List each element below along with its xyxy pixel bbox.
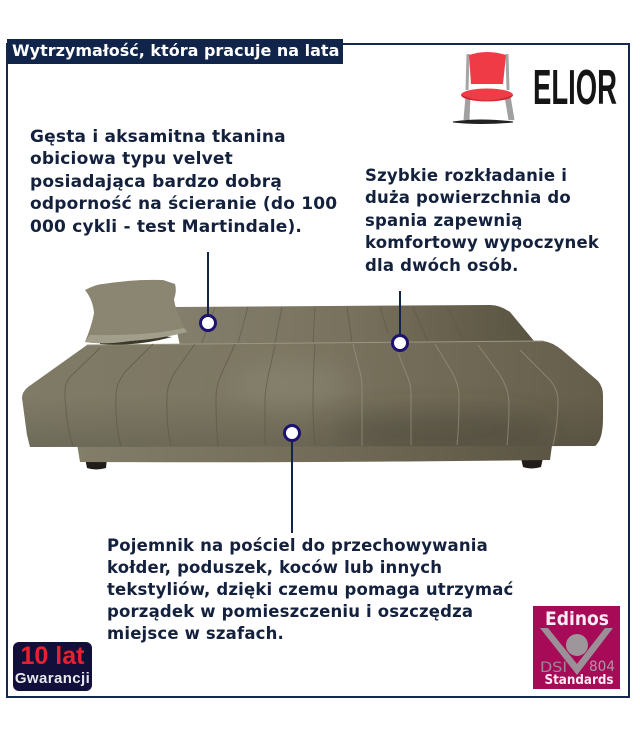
callout line and marker: velvet (200, 252, 216, 330)
badge: 10 years warranty: Gwarancji (15, 670, 90, 687)
text block: bedding container: miejsce w szafach. (107, 624, 284, 643)
text block: velvet fabric (30, 127, 337, 237)
badge: 10 years warranty: 10 lat (21, 642, 84, 670)
text block: fast unfolding: komfortowy wypoczynek (365, 233, 599, 252)
text block: bedding container: porządek w pomieszczeniu i oszczędza (107, 602, 473, 621)
sofa seat (22, 341, 603, 447)
icon: red chair (453, 52, 513, 124)
sofa back section (172, 305, 534, 346)
text block: fast unfolding: Szybkie rozkładanie i (365, 166, 567, 185)
badge: 10 years warranty (13, 642, 92, 691)
sofa base (76, 438, 553, 462)
badge: Edinos standards: Standards (544, 673, 614, 688)
text block: velvet fabric: 000 cykli - test Martindale). (30, 217, 302, 237)
callout line and marker: sleeping area (392, 291, 408, 350)
callout line and marker: storage (284, 426, 300, 533)
badge: Edinos standards: DSI (540, 660, 567, 676)
badge: Edinos standards: Edinos (545, 608, 609, 630)
text block: velvet fabric: Gęsta i aksamitna tkanina (30, 127, 286, 147)
pillow (85, 280, 187, 345)
text block: velvet fabric: odporność na ścieranie (do 100 (30, 194, 337, 214)
text block: fast unfolding (365, 166, 600, 275)
sofa illustration (22, 252, 603, 533)
text block: fast unfolding: duża powierzchnia do (365, 188, 571, 207)
text block: fast unfolding: spania zapewnią (365, 211, 523, 230)
text block: velvet fabric: obiciowa typu velvet (30, 149, 233, 169)
badge: Edinos standards: 804 (589, 659, 615, 675)
title: Wytrzymałość, która pracuje na lata (12, 41, 339, 60)
text block: bedding container: kołder, poduszek, koców lub innych (107, 558, 442, 577)
text block: bedding container: Pojemnik na pościel do przechowywania (107, 536, 488, 554)
sofa feet (85, 458, 543, 470)
text block: velvet fabric: posiadająca bardzo dobrą (30, 172, 282, 192)
text block: fast unfolding: dla dwóch osób. (365, 256, 519, 275)
text block: bedding container (107, 536, 513, 643)
text block: bedding container: tekstyliów, dzięki czemu pomaga utrzymać (107, 580, 513, 599)
